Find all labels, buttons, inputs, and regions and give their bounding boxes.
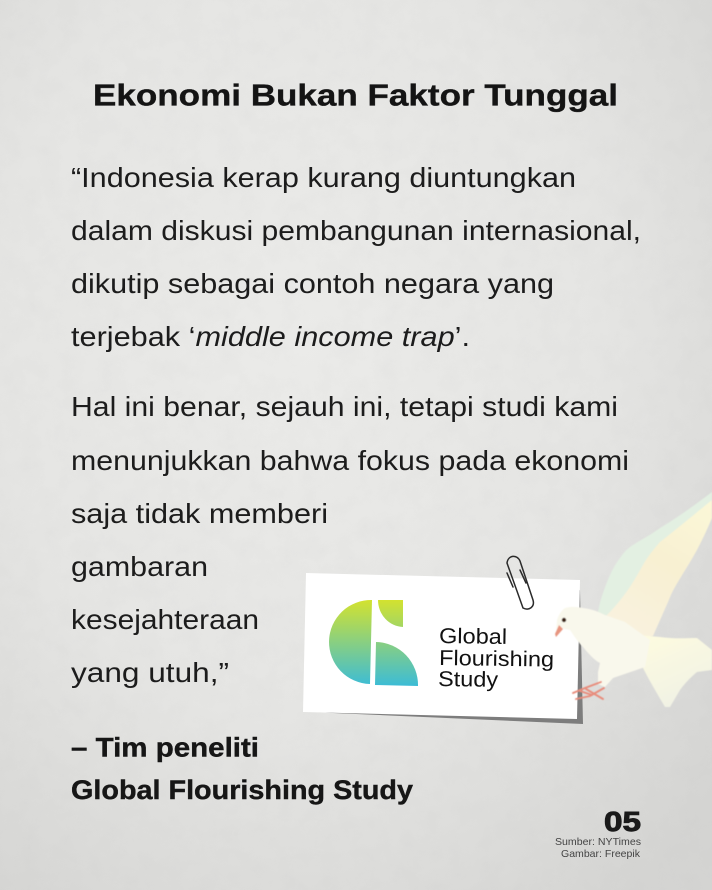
quote paragraph 2: yang utuh,” bbox=[71, 657, 229, 688]
attribution: – Tim peneliti bbox=[71, 732, 259, 762]
logo wordmark: Global bbox=[439, 624, 507, 649]
attribution: Global Flourishing Study bbox=[71, 775, 413, 805]
attribution bbox=[71, 732, 413, 805]
logo mark bbox=[329, 600, 418, 686]
quote paragraph 1: dikutip sebagai contoh negara yang bbox=[71, 268, 554, 299]
body and head bbox=[556, 607, 650, 687]
source credits: Gambar: Freepik bbox=[561, 848, 641, 860]
title: Ekonomi Bukan Faktor Tunggal bbox=[93, 78, 618, 112]
source credits bbox=[555, 836, 641, 860]
quote paragraph 2: Hal ini benar, sejauh ini, tetapi studi kami bbox=[71, 391, 618, 422]
feet bbox=[573, 682, 604, 699]
back wing bbox=[598, 492, 712, 618]
front wing bbox=[606, 500, 712, 640]
icon: paper clip bbox=[507, 556, 533, 609]
quote paragraph 1: terjebak ‘ middle income trap ’. bbox=[71, 321, 470, 352]
logo card bbox=[303, 556, 583, 724]
quote paragraph 2: gambaran bbox=[71, 551, 208, 582]
quote paragraph 2: saja tidak memberi bbox=[71, 498, 328, 529]
card shadow bbox=[303, 590, 583, 724]
logo wordmark bbox=[438, 624, 554, 692]
white card bbox=[303, 573, 580, 719]
logo wordmark: Flourishing bbox=[439, 646, 554, 672]
quote paragraph 2: kesejahteraan bbox=[71, 604, 259, 635]
page number: 05 bbox=[604, 806, 641, 837]
tail bbox=[625, 635, 712, 707]
eye bbox=[562, 618, 566, 622]
quote paragraph 1: dalam diskusi pembangunan internasional, bbox=[71, 215, 641, 246]
beak bbox=[555, 625, 563, 637]
quote paragraph 1: “Indonesia kerap kurang diuntungkan bbox=[71, 162, 576, 193]
quote paragraph 2: menunjukkan bahwa fokus pada ekonomi bbox=[71, 445, 629, 476]
source credits: Sumber: NYTimes bbox=[555, 836, 641, 848]
logo wordmark: Study bbox=[438, 667, 499, 692]
quote paragraph 2 bbox=[71, 391, 629, 688]
icon: dove bbox=[555, 492, 712, 707]
quote paragraph 1 bbox=[71, 162, 641, 352]
